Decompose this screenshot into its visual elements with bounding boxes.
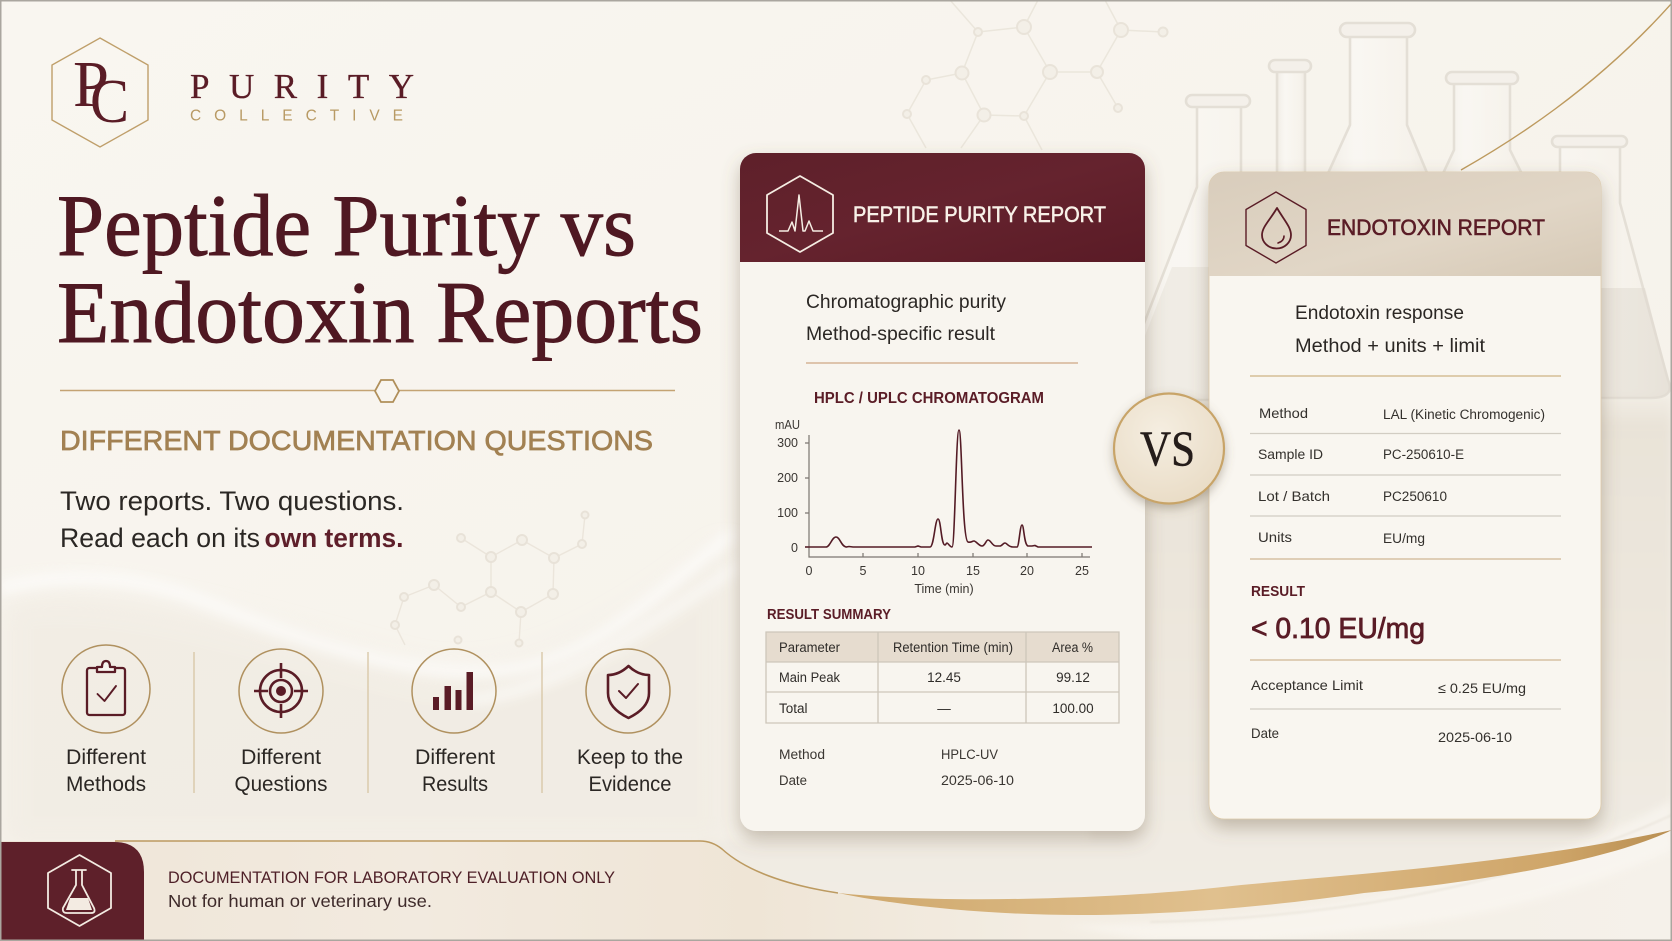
intro text: [60, 486, 404, 553]
lab flasks: [1118, 23, 1670, 400]
limit and date: ≤ 0.25 EU/mg: [1438, 680, 1526, 696]
feature: different results: [412, 649, 496, 796]
title divider: [60, 380, 675, 402]
icon: clipboard: [87, 661, 125, 715]
result table: Total: [779, 701, 808, 716]
result table: 12.45: [927, 670, 961, 685]
VS badge: [1114, 394, 1224, 504]
title: [57, 178, 703, 362]
card header: [1209, 172, 1601, 276]
report details: PC250610: [1383, 489, 1447, 504]
card header: [740, 153, 1145, 262]
report details: Sample ID: [1258, 446, 1323, 462]
footer flask tab: [0, 842, 144, 941]
result table: 99.12: [1056, 670, 1090, 685]
feature: different results: Results: [422, 772, 488, 796]
chromatogram chart: mAU: [775, 418, 800, 432]
card summary text: Chromatographic purity: [806, 291, 1006, 313]
card summary text: Endotoxin response: [1295, 302, 1464, 324]
card summary text: Method + units + limit: [1295, 335, 1486, 357]
feature: different methods: Methods: [66, 772, 146, 796]
method and date: Date: [779, 773, 807, 788]
footer text: DOCUMENTATION FOR LABORATORY EVALUATION ONLY: [168, 868, 615, 887]
chromatogram chart: 5: [860, 564, 867, 578]
chromatogram chart: 25: [1075, 564, 1089, 578]
limit and date: [1250, 677, 1561, 745]
feature: different results: Different: [415, 745, 495, 769]
feature: different questions: Different: [241, 745, 321, 769]
logo: [52, 38, 414, 147]
report details: EU/mg: [1383, 531, 1425, 546]
result table: [766, 632, 1119, 723]
method and date: Method: [779, 747, 825, 762]
chromatogram chart: 15: [966, 564, 980, 578]
molecule: left: [391, 512, 588, 646]
molecule: top centre: [903, 0, 1168, 150]
intro text: own terms.: [264, 523, 404, 553]
card header: ENDOTOXIN REPORT: [1327, 215, 1545, 240]
intro text: Two reports. Two questions.: [60, 486, 404, 516]
icon: water drop hexagon: [1246, 192, 1306, 263]
logo: P: [73, 48, 109, 121]
footer text: Not for human or veterinary use.: [168, 891, 432, 911]
result table: Retention Time (min): [893, 640, 1013, 655]
chromatogram chart: 100: [777, 506, 798, 520]
feature: different questions: Questions: [234, 772, 328, 796]
footer edge line: [115, 841, 838, 893]
chromatogram chart: 0: [791, 541, 798, 555]
limit and date: Acceptance Limit: [1251, 677, 1363, 693]
feature: different methods: Different: [66, 745, 146, 769]
VS badge: VS: [1140, 420, 1195, 476]
feature: different questions: [234, 649, 328, 796]
report details: PC-250610-E: [1383, 447, 1464, 462]
chart heading: HPLC / UPLC CHROMATOGRAM: [814, 390, 1044, 407]
result table: 100.00: [1052, 701, 1094, 716]
chromatogram chart: Time (min): [914, 582, 974, 596]
chromatogram chart: 300: [777, 436, 798, 450]
result value: [1250, 583, 1561, 660]
icon: target: [254, 663, 308, 718]
limit and date: 2025-06-10: [1438, 729, 1512, 745]
icon: chromatogram hexagon: [767, 176, 833, 252]
subheading: DIFFERENT DOCUMENTATION QUESTIONS: [60, 425, 653, 456]
method and date: [779, 747, 1014, 788]
footer band: [0, 800, 1672, 941]
card summary text: [806, 291, 1078, 363]
card header: PEPTIDE PURITY REPORT: [853, 202, 1106, 227]
footer text: [168, 868, 615, 911]
logo: PURITY: [190, 67, 414, 106]
report details: Method: [1259, 405, 1308, 421]
gold accent curve: top right: [1461, 3, 1672, 170]
panel: peptide purity report: [740, 153, 1145, 831]
result table: —: [937, 701, 951, 716]
intro text: Read each on its: [60, 523, 260, 553]
gold ribbon: [838, 830, 1672, 915]
feature: keep to the evidence: Evidence: [588, 772, 672, 796]
result table: Area %: [1052, 640, 1093, 655]
feature: keep to the evidence: [577, 649, 683, 796]
chromatogram chart: 200: [777, 471, 798, 485]
icon: flask in hexagon: [48, 855, 111, 926]
limit and date: Date: [1251, 725, 1279, 741]
report details: [1250, 405, 1561, 559]
logo: C: [90, 68, 129, 136]
method and date: 2025-06-10: [941, 773, 1014, 788]
card summary text: Method-specific result: [806, 323, 996, 345]
result value: RESULT: [1251, 583, 1305, 600]
icon: shield: [608, 666, 649, 718]
panel: endotoxin report: [1209, 172, 1601, 819]
result table: Parameter: [779, 640, 840, 655]
icon dividers: [194, 652, 542, 793]
logo: COLLECTIVE: [190, 108, 403, 124]
chromatogram chart: 0: [806, 564, 813, 578]
card summary text: [1250, 302, 1561, 376]
method and date: HPLC-UV: [941, 747, 998, 762]
title: Peptide Purity vs: [57, 178, 636, 275]
report details: Lot / Batch: [1258, 488, 1330, 504]
feature: keep to the evidence: Keep to the: [577, 745, 683, 769]
result summary heading: RESULT SUMMARY: [767, 607, 891, 623]
chromatogram chart: 10: [911, 564, 925, 578]
chromatogram chart: [775, 418, 1092, 596]
chromatogram chart: 20: [1020, 564, 1034, 578]
result table: Main Peak: [779, 670, 840, 685]
icon: bars: [433, 672, 473, 710]
title: Endotoxin Reports: [57, 265, 703, 362]
report details: LAL (Kinetic Chromogenic): [1383, 407, 1545, 422]
feature: different methods: [62, 645, 150, 796]
report details: Units: [1258, 529, 1292, 545]
result value: < 0.10 EU/mg: [1251, 613, 1425, 645]
